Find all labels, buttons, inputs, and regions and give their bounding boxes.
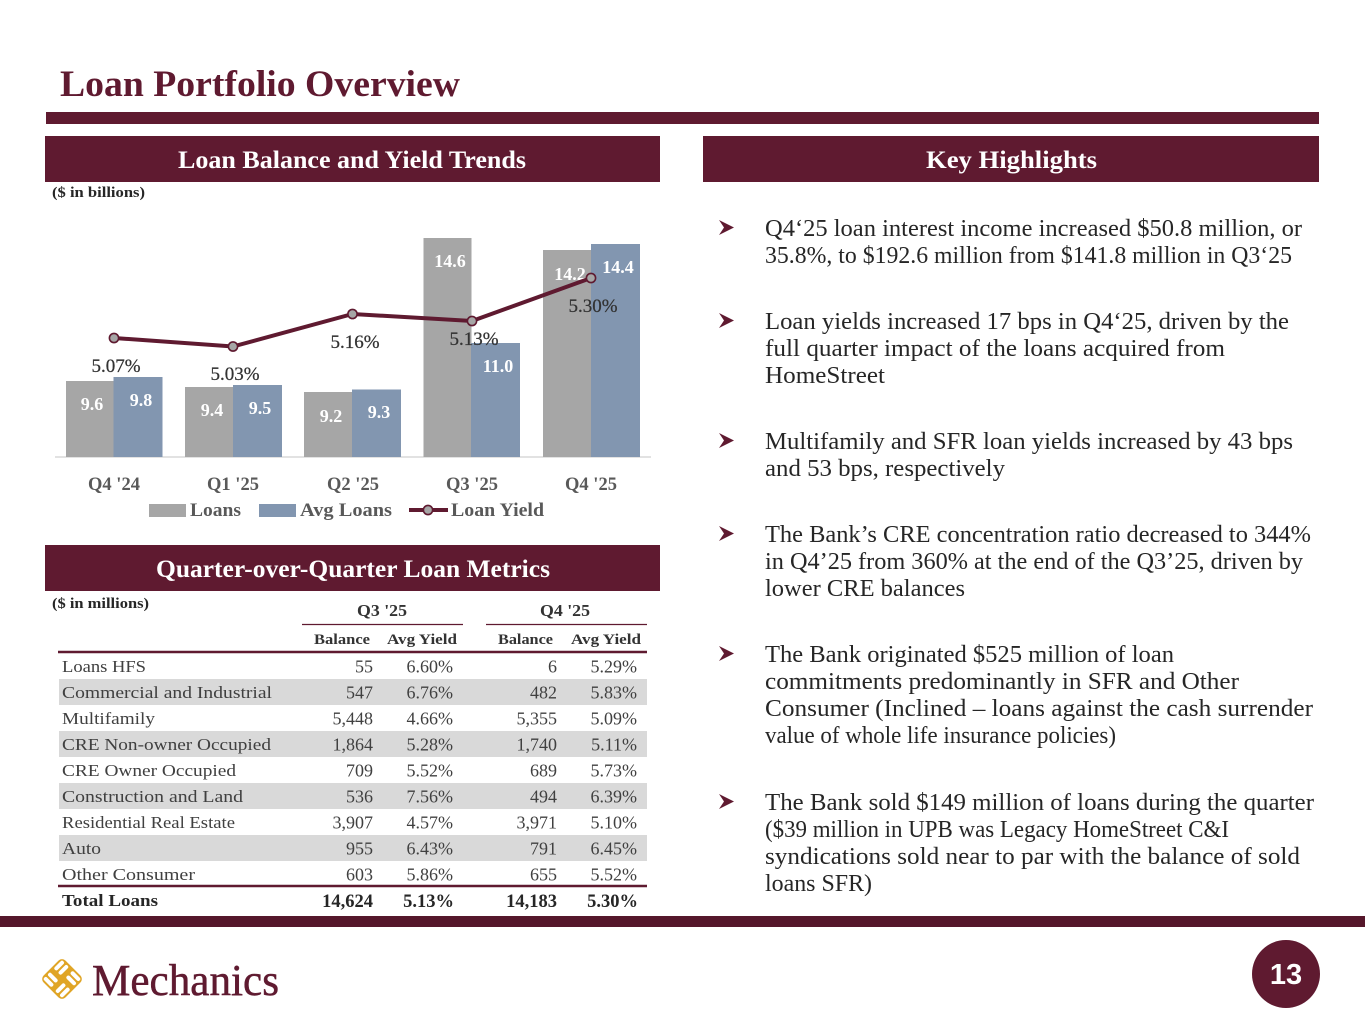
legend: Avg Loans bbox=[300, 500, 392, 521]
row: Multifamily bbox=[62, 708, 637, 728]
panel heading: loan balance and yield trends: Loan Balance and Yield Trends bbox=[178, 147, 526, 174]
row: CRE Owner Occupied bbox=[62, 760, 637, 780]
row: CRE Non-owner Occupied: 1,740 bbox=[516, 734, 557, 754]
row: Commercial and Industrial bbox=[62, 682, 637, 702]
logo: Mechanics: Mechanics bbox=[92, 956, 279, 1005]
row: Residential Real Estate: Residential Real Estate bbox=[62, 813, 235, 832]
table column headers: Balance bbox=[314, 632, 370, 648]
bars: Q1 '25 bbox=[185, 385, 282, 457]
loan metrics table bbox=[58, 601, 647, 912]
combo chart: loan balance and yield bbox=[55, 238, 651, 521]
bullet: loan sales: The Bank sold $149 million of loans during the quarter bbox=[765, 790, 1314, 816]
icon: woven diamond bbox=[40, 957, 84, 1001]
row: Auto: Auto bbox=[62, 839, 101, 858]
row: Loans HFS: 5.29% bbox=[590, 656, 637, 676]
row: Total Loans bbox=[58, 886, 647, 912]
unit note: billions: ($ in billions) bbox=[52, 185, 145, 201]
bars: Q4 '25: 14.4 bbox=[602, 257, 634, 277]
unit note: millions: ($ in millions) bbox=[52, 596, 149, 612]
panel heading: key highlights: Key Highlights bbox=[926, 147, 1097, 174]
bullet: originations: value of whole life insurance policies) bbox=[765, 723, 1116, 749]
row: Commercial and Industrial: 5.83% bbox=[590, 682, 637, 702]
row: Loans HFS: Loans HFS bbox=[62, 657, 146, 676]
row: CRE Non-owner Occupied bbox=[62, 734, 637, 754]
row: Auto bbox=[62, 838, 637, 858]
bullet: CRE concentration: lower CRE balances bbox=[765, 576, 965, 602]
page number badge bbox=[1252, 940, 1320, 1008]
table column headers: Q4 '25 bbox=[540, 601, 590, 620]
row: Loans HFS: 6.60% bbox=[406, 656, 453, 676]
bullet: multifamily and SFR: and 53 bps, respectively bbox=[765, 456, 1005, 482]
panel heading: loan balance and yield trends bbox=[45, 136, 660, 182]
row: CRE Non-owner Occupied: CRE Non-owner Occupied bbox=[62, 735, 272, 754]
row: Other Consumer: 603 bbox=[346, 864, 373, 884]
row: Construction and Land: 494 bbox=[530, 786, 557, 806]
table column headers: Avg Yield bbox=[387, 632, 458, 648]
bullet: originations: The Bank originated $525 million of loan bbox=[765, 642, 1174, 668]
legend bbox=[149, 500, 544, 521]
bullet: loan interest income bbox=[719, 216, 1302, 269]
row: CRE Owner Occupied: CRE Owner Occupied bbox=[62, 761, 237, 780]
row: CRE Owner Occupied: 5.73% bbox=[590, 760, 637, 780]
bullet: loan sales: loans SFR) bbox=[765, 871, 872, 897]
table column headers: Balance bbox=[498, 632, 553, 648]
bars: Q4 '24: 9.6 bbox=[81, 394, 103, 414]
bars: Q4 '24: 9.8 bbox=[130, 390, 152, 410]
row: CRE Owner Occupied: 5.52% bbox=[406, 760, 453, 780]
bullet: loan sales bbox=[719, 790, 1314, 897]
title: Loan Portfolio Overview bbox=[60, 64, 460, 105]
category axis labels bbox=[88, 475, 617, 495]
bars: Q3 '25: 14.6 bbox=[434, 251, 466, 271]
row: Auto: 6.43% bbox=[406, 838, 453, 858]
row: Residential Real Estate: 5.10% bbox=[590, 812, 637, 832]
yield labels: 5.07% bbox=[91, 356, 141, 377]
bullet: loan sales: syndications sold near to par with the balance of sold bbox=[765, 844, 1300, 870]
panel heading: key highlights bbox=[703, 136, 1319, 182]
row: Construction and Land: Construction and Land bbox=[62, 787, 244, 806]
category axis labels: Q4 '24 bbox=[88, 475, 140, 495]
row: Auto: 955 bbox=[346, 838, 373, 858]
row: Residential Real Estate: 4.57% bbox=[406, 812, 453, 832]
bars: Q3 '25 bbox=[424, 238, 520, 457]
row: Total Loans: 14,183 bbox=[506, 892, 557, 912]
yield labels: 5.03% bbox=[210, 364, 260, 385]
bullet: loan yields: HomeStreet bbox=[765, 363, 885, 389]
bullet: loan yields: full quarter impact of the loans acquired from bbox=[765, 336, 1225, 362]
row: Other Consumer bbox=[62, 864, 637, 884]
row: Auto: 791 bbox=[530, 838, 557, 858]
row: Loans HFS: 6 bbox=[548, 656, 557, 676]
row: Construction and Land: 7.56% bbox=[406, 786, 453, 806]
bars: Q4 '25: 14.2 bbox=[554, 264, 586, 284]
page number badge: 13 bbox=[1270, 959, 1302, 991]
row: Commercial and Industrial: Commercial and Industrial bbox=[62, 683, 272, 702]
bars: Q2 '25: 9.3 bbox=[368, 402, 390, 422]
bars: Q4 '24 bbox=[66, 377, 162, 457]
row: Residential Real Estate: 3,907 bbox=[332, 812, 373, 832]
row: Commercial and Industrial: 547 bbox=[346, 682, 373, 702]
row: Construction and Land: 536 bbox=[346, 786, 373, 806]
row: Other Consumer: 5.86% bbox=[406, 864, 453, 884]
row: Total Loans: 14,624 bbox=[322, 892, 373, 912]
row: Total Loans: Total Loans bbox=[62, 891, 158, 910]
table column headers: Avg Yield bbox=[571, 632, 642, 648]
bars: Q1 '25: 9.5 bbox=[249, 398, 271, 418]
bullet: loan sales: ($39 million in UPB was Legacy HomeStreet C&I bbox=[765, 817, 1229, 843]
row: Loans HFS bbox=[62, 656, 637, 676]
row: Multifamily: 4.66% bbox=[406, 708, 453, 728]
panel heading: quarter-over-quarter loan metrics: Quarter-over-Quarter Loan Metrics bbox=[156, 556, 550, 583]
row: Commercial and Industrial: 6.76% bbox=[406, 682, 453, 702]
row: Auto: 6.45% bbox=[590, 838, 637, 858]
bullet: multifamily and SFR: Multifamily and SFR loan yields increased by 43 bps bbox=[765, 429, 1293, 455]
row: Other Consumer: 5.52% bbox=[590, 864, 637, 884]
row: Loans HFS: 55 bbox=[355, 656, 373, 676]
legend: Loans bbox=[190, 500, 241, 521]
category axis labels: Q4 '25 bbox=[565, 475, 617, 495]
yield labels bbox=[91, 296, 618, 385]
row: Residential Real Estate bbox=[62, 812, 637, 832]
row: Total Loans: 5.30% bbox=[587, 892, 638, 912]
title rule bbox=[46, 112, 1319, 124]
bullet: CRE concentration bbox=[719, 522, 1311, 602]
row: Commercial and Industrial: 482 bbox=[530, 682, 557, 702]
bars: Q2 '25: 9.2 bbox=[320, 406, 342, 426]
row: Residential Real Estate: 3,971 bbox=[516, 812, 557, 832]
table column headers: Q3 '25 bbox=[357, 601, 407, 620]
bullet: loan interest income: 35.8%, to $192.6 million from $141.8 million in Q3‘25 bbox=[765, 243, 1292, 269]
row: CRE Owner Occupied: 689 bbox=[530, 760, 557, 780]
bars: Q1 '25: 9.4 bbox=[201, 400, 223, 420]
category axis labels: Q3 '25 bbox=[446, 475, 498, 495]
row: Construction and Land bbox=[62, 786, 637, 806]
row: Multifamily: 5.09% bbox=[590, 708, 637, 728]
row: CRE Non-owner Occupied: 1,864 bbox=[332, 734, 373, 754]
yield labels: 5.16% bbox=[330, 332, 380, 353]
zebra stripes bbox=[59, 679, 647, 861]
footer bar bbox=[0, 916, 1365, 927]
bullet: CRE concentration: in Q4’25 from 360% at the end of the Q3’25, driven by bbox=[765, 549, 1303, 575]
bullet: loan yields bbox=[719, 309, 1289, 389]
yield labels: 5.13% bbox=[449, 329, 499, 350]
row: Multifamily: 5,355 bbox=[516, 708, 557, 728]
row: Other Consumer: 655 bbox=[530, 864, 557, 884]
panel heading: quarter-over-quarter loan metrics bbox=[45, 545, 660, 591]
row: CRE Non-owner Occupied: 5.28% bbox=[406, 734, 453, 754]
bars: Q3 '25: 11.0 bbox=[483, 356, 513, 376]
bullet: CRE concentration: The Bank’s CRE concentration ratio decreased to 344% bbox=[765, 522, 1311, 548]
bullet: originations: commitments predominantly in SFR and Other bbox=[765, 669, 1239, 695]
bullet: originations bbox=[719, 642, 1313, 749]
bullet: loan yields: Loan yields increased 17 bps in Q4‘25, driven by the bbox=[765, 309, 1289, 335]
bars: Q2 '25 bbox=[304, 390, 401, 457]
row: Total Loans: 5.13% bbox=[403, 892, 454, 912]
bullet: originations: Consumer (Inclined – loans against the cash surrender bbox=[765, 696, 1313, 722]
bullet: loan interest income: Q4‘25 loan interest income increased $50.8 million, or bbox=[765, 216, 1302, 242]
legend: Loan Yield bbox=[451, 500, 544, 521]
row: Other Consumer: Other Consumer bbox=[62, 865, 195, 884]
bars: Q4 '25 bbox=[543, 244, 640, 457]
bullet: multifamily and SFR bbox=[719, 429, 1293, 482]
category axis labels: Q2 '25 bbox=[327, 475, 379, 495]
row: Multifamily: Multifamily bbox=[62, 709, 156, 728]
row: CRE Non-owner Occupied: 5.11% bbox=[591, 734, 637, 754]
line series: loan yield bbox=[109, 273, 596, 351]
row: Multifamily: 5,448 bbox=[332, 708, 373, 728]
row: Construction and Land: 6.39% bbox=[590, 786, 637, 806]
yield labels: 5.30% bbox=[568, 296, 618, 317]
row: CRE Owner Occupied: 709 bbox=[346, 760, 373, 780]
category axis labels: Q1 '25 bbox=[207, 475, 259, 495]
table column headers bbox=[58, 601, 647, 652]
